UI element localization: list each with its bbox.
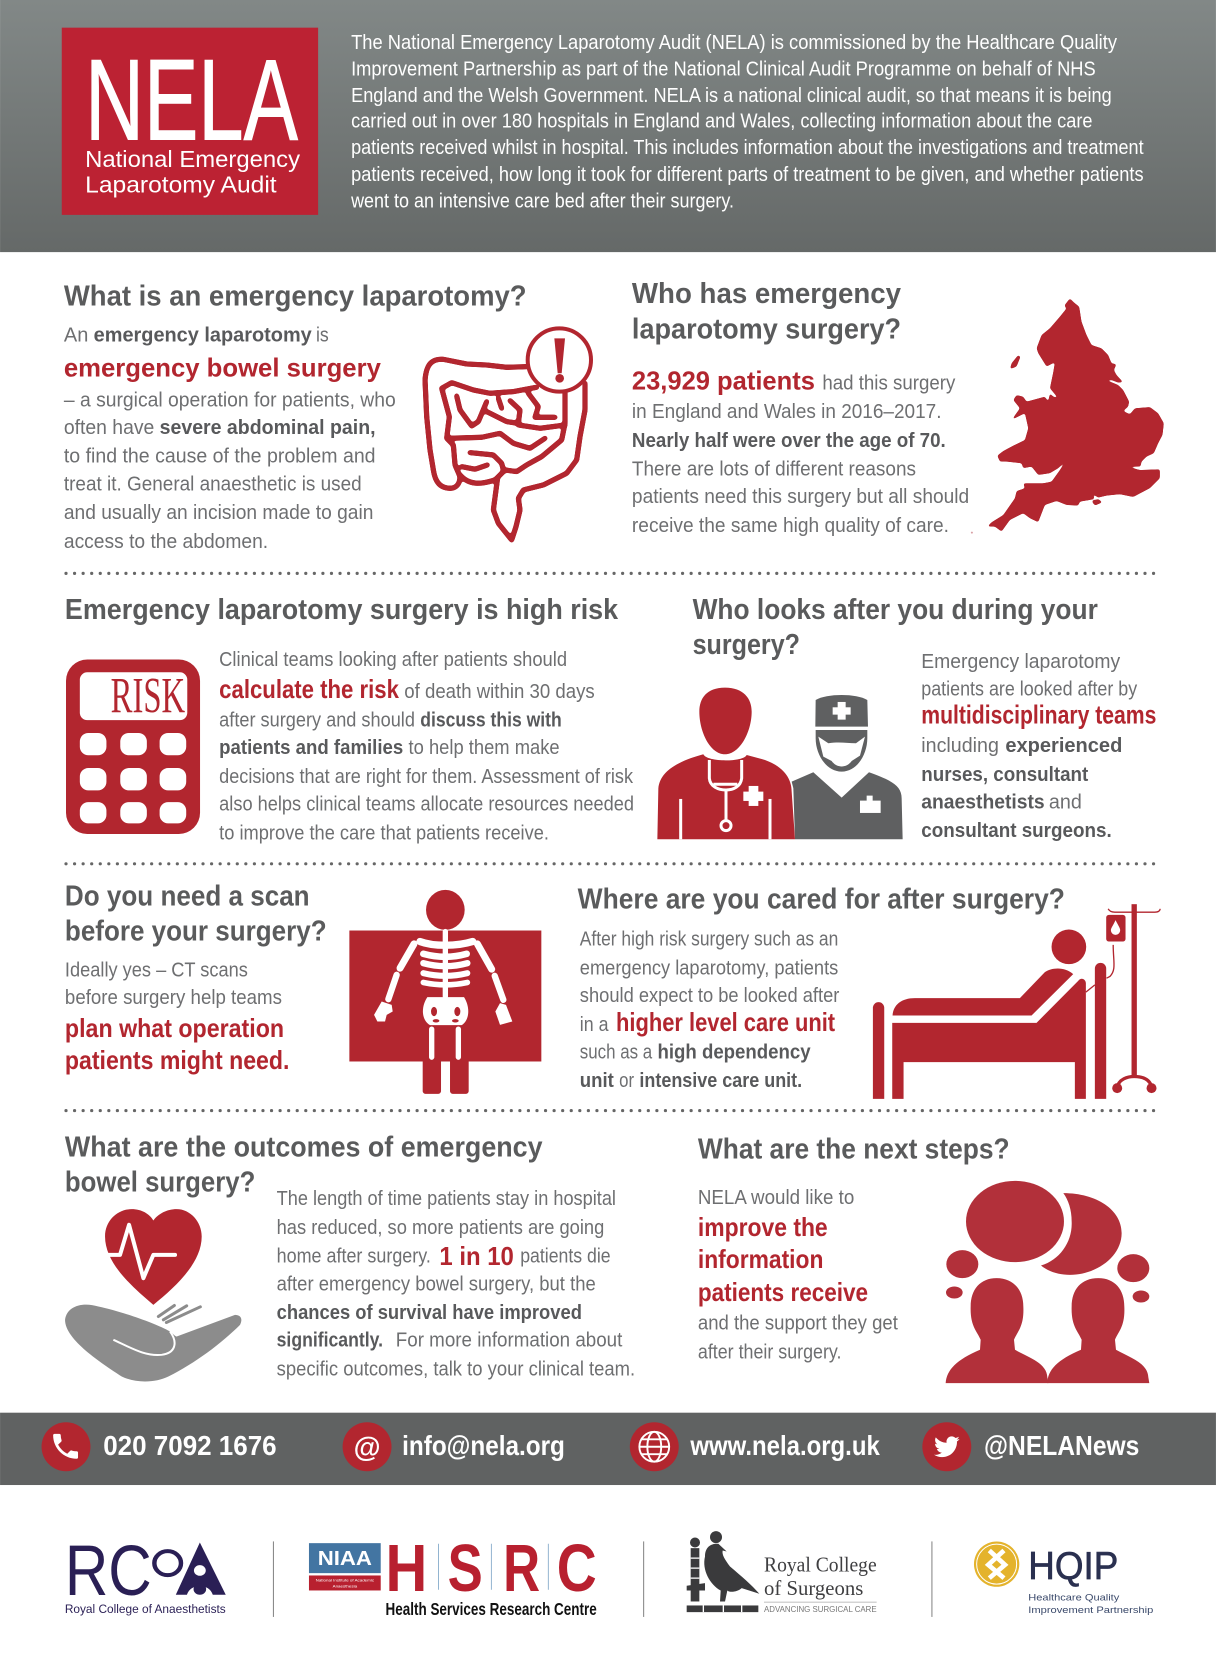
text block: had this surgery	[822, 372, 956, 394]
text block: or	[619, 1070, 634, 1092]
intro paragraph: The National Emergency Laparotomy Audit (NELA) is commissioned by the Healthcare Quality	[351, 32, 1118, 54]
logo: Royal College of Surgeons: ADVANCING SURGICAL CARE	[764, 1605, 877, 1614]
logo: Royal College of Surgeons: of Surgeons	[764, 1578, 863, 1600]
text block: such as a	[580, 1041, 653, 1063]
heading: Where are you cared for after surgery?	[578, 883, 1065, 915]
logo: NIAA and HSRC: C	[557, 1530, 597, 1605]
text block: plan what operation	[65, 1015, 284, 1043]
heading: before your surgery?	[65, 915, 327, 947]
logo: NIAA and HSRC: H	[386, 1530, 427, 1605]
text block: receive the same high quality of care.	[632, 515, 949, 537]
heading: bowel surgery?	[65, 1166, 255, 1198]
NELA logo: National Emergency	[85, 146, 300, 172]
heading: Who has emergency	[632, 278, 901, 310]
text block: anaesthetists	[921, 791, 1045, 813]
text block: unit	[580, 1070, 614, 1092]
text block: including	[921, 735, 999, 757]
intro paragraph: patients received whilst in hospital. This includes information about the investigations and treatment	[351, 137, 1144, 159]
text block: 1 in 10	[439, 1243, 514, 1271]
heading: Who looks after you during your	[693, 594, 1098, 626]
text block: intensive care unit.	[639, 1070, 802, 1092]
logo: HQIP	[974, 1541, 1153, 1615]
text block: before surgery help teams	[65, 987, 282, 1009]
text block: NELA would like to	[698, 1187, 854, 1209]
text block: treat it. General anaesthetic is used	[64, 473, 362, 495]
text block: should expect to be looked after	[580, 985, 840, 1007]
text block: has reduced, so more patients are going	[277, 1217, 604, 1239]
text block	[277, 1188, 635, 1380]
intro paragraph: England and the Welsh Government. NELA is a national clinical audit, so that means it is being	[351, 85, 1112, 107]
text block: information	[698, 1246, 823, 1274]
text block: Emergency laparotomy	[921, 651, 1121, 673]
intro paragraph: went to an intensive care bed after their surgery.	[350, 190, 734, 212]
text block: discuss this with	[420, 710, 562, 732]
text block: high dependency	[657, 1041, 811, 1063]
logo: NIAA and HSRC: R	[503, 1530, 540, 1605]
email contact: info@nela.org	[402, 1430, 565, 1461]
intro paragraph: Improvement Partnership as part of the National Clinical Audit Programme on behalf of NHS	[351, 59, 1096, 81]
panel: outcomes	[65, 1131, 635, 1381]
text block: specific outcomes, talk to your clinical team.	[277, 1358, 635, 1380]
twitter contact: @NELANews	[984, 1430, 1139, 1461]
text block: also helps clinical teams allocate resources needed	[219, 794, 634, 816]
logo: NIAA and HSRC	[309, 1530, 597, 1619]
website contact	[630, 1422, 880, 1471]
text block: calculate the risk	[219, 676, 400, 704]
heading: What are the next steps?	[698, 1133, 1010, 1165]
icon: risk calculator: RISK	[111, 668, 185, 725]
text block: access to the abdomen.	[64, 531, 268, 553]
heading	[65, 1131, 543, 1198]
text block	[632, 367, 969, 537]
text block	[65, 960, 289, 1075]
logo: HQIP: HQIP	[1028, 1545, 1118, 1588]
logo: NIAA and HSRC: National Institute of Academic	[316, 1578, 374, 1582]
text block: in a	[580, 1014, 609, 1036]
text block: significantly.	[277, 1330, 383, 1352]
text block: patients and families	[219, 737, 403, 759]
logo: HQIP: Improvement Partnership	[1028, 1605, 1153, 1615]
map: England and Wales	[971, 298, 1164, 534]
text block: consultant surgeons.	[921, 820, 1112, 842]
icon: two people with speech bubbles	[946, 1181, 1149, 1383]
panel: next steps	[698, 1133, 1149, 1383]
logo: RCoA: Royal College of Anaesthetists	[65, 1603, 226, 1616]
NELA logo: NELA	[85, 36, 298, 164]
text block: emergency laparotomy	[94, 324, 312, 346]
icon: heart and hand	[65, 1209, 241, 1381]
text block: Nearly half were over the age of 70.	[632, 430, 946, 452]
text block: is	[316, 324, 329, 346]
text block: For more information about	[396, 1330, 623, 1352]
logo: Royal College of Surgeons	[687, 1531, 877, 1614]
text block: after surgery and should	[219, 710, 415, 732]
text block: to improve the care that patients receive.	[219, 822, 549, 844]
icon: patient in bed with drip	[873, 904, 1160, 1099]
text block: chances of survival have improved	[277, 1302, 582, 1324]
text block: after their surgery.	[698, 1341, 841, 1363]
panel: do you need a scan	[65, 880, 541, 1094]
text block: An	[64, 324, 88, 346]
text block: experienced	[1005, 735, 1122, 757]
logo: HQIP: Healthcare Quality	[1028, 1592, 1120, 1602]
panel: surgery is high risk	[65, 594, 634, 844]
text block: multidisciplinary teams	[921, 701, 1156, 729]
text block: patients might need.	[65, 1047, 289, 1075]
text block: Clinical teams looking after patients should	[219, 649, 567, 671]
heading: What is an emergency laparotomy?	[64, 280, 527, 312]
text block: 23,929 patients	[632, 367, 815, 395]
phone contact: 020 7092 1676	[103, 1430, 277, 1461]
text block: home after surgery.	[277, 1246, 431, 1268]
logo: NIAA and HSRC: S	[448, 1530, 483, 1605]
text block	[698, 1187, 898, 1363]
text block	[580, 929, 840, 1092]
panel: who has emergency laparotomy surgery	[632, 278, 1164, 537]
text block: patients need this surgery but all should	[632, 486, 969, 508]
text block: decisions that are right for them. Assessment of risk	[219, 766, 634, 788]
intro paragraph	[350, 32, 1144, 212]
text block: emergency bowel surgery	[64, 355, 382, 383]
logo: NIAA and HSRC: Health Services Research Centre	[386, 1599, 597, 1619]
logo: NIAA and HSRC: Anaesthesia	[333, 1584, 358, 1588]
text block: patients are looked after by	[921, 679, 1138, 701]
NELA logo	[62, 28, 318, 215]
heading: laparotomy surgery?	[632, 313, 901, 345]
email contact: @	[354, 1431, 381, 1462]
text block: emergency laparotomy, patients	[580, 957, 838, 979]
text block: – a surgical operation for patients, who	[64, 389, 396, 411]
text block: There are lots of different reasons	[632, 459, 916, 481]
text block: severe abdominal pain,	[160, 417, 376, 439]
NELA logo: Laparotomy Audit	[85, 172, 277, 198]
heading	[693, 594, 1098, 661]
logo: NIAA and HSRC: NIAA	[318, 1548, 372, 1570]
icon: risk calculator	[66, 660, 200, 834]
heading	[632, 278, 901, 345]
text block: nurses, consultant	[921, 764, 1089, 786]
logo: RCoA: RC	[65, 1530, 152, 1610]
text block	[219, 649, 634, 844]
icon: surgeon and nurse	[657, 688, 903, 839]
phone contact	[42, 1422, 277, 1471]
text block: After high risk surgery such as an	[580, 929, 838, 951]
text block: often have	[64, 417, 154, 439]
text block: higher level care unit	[616, 1009, 836, 1037]
email contact	[343, 1422, 565, 1471]
website contact: www.nela.org.uk	[690, 1430, 880, 1461]
text block: The length of time patients stay in hospital	[277, 1188, 616, 1210]
text block: and	[1049, 791, 1082, 813]
text block: after emergency bowel surgery, but the	[277, 1273, 596, 1295]
panel: where are you cared for	[578, 883, 1160, 1099]
logo: RCoA	[65, 1530, 226, 1616]
panel: what is an emergency laparotomy	[64, 280, 591, 553]
text block: to help them make	[409, 737, 560, 759]
text block: Ideally yes – CT scans	[65, 960, 248, 982]
text block: and the support they get	[698, 1313, 898, 1335]
text block	[921, 651, 1156, 842]
text block: of death within 30 days	[404, 681, 595, 703]
icon: x-ray skeleton	[349, 890, 541, 1094]
intro paragraph: carried out in over 180 hospitals in England and Wales, collecting information about the care	[351, 111, 1093, 133]
twitter contact	[922, 1422, 1139, 1471]
contact bar	[0, 1413, 1216, 1485]
text block: to find the cause of the problem and	[64, 446, 376, 468]
text block: and usually an incision made to gain	[64, 502, 373, 524]
text block: improve the	[698, 1214, 828, 1242]
text block: in England and Wales in 2016–2017.	[632, 401, 941, 423]
text block: patients receive	[698, 1279, 868, 1307]
intro paragraph: patients received, how long it took for different parts of treatment to be given, and whether patients	[351, 164, 1144, 186]
panel: who looks after you	[657, 594, 1156, 842]
icon: intestines with alert	[425, 328, 591, 540]
header banner	[0, 0, 1216, 252]
heading: What are the outcomes of emergency	[65, 1131, 543, 1163]
text block: patients die	[520, 1246, 611, 1268]
heading: Emergency laparotomy surgery is high risk	[65, 594, 618, 626]
text block	[64, 324, 396, 553]
heading	[65, 880, 327, 947]
logo: Royal College of Surgeons: Royal College	[764, 1554, 877, 1576]
heading: Do you need a scan	[65, 880, 310, 912]
heading: surgery?	[693, 629, 800, 661]
